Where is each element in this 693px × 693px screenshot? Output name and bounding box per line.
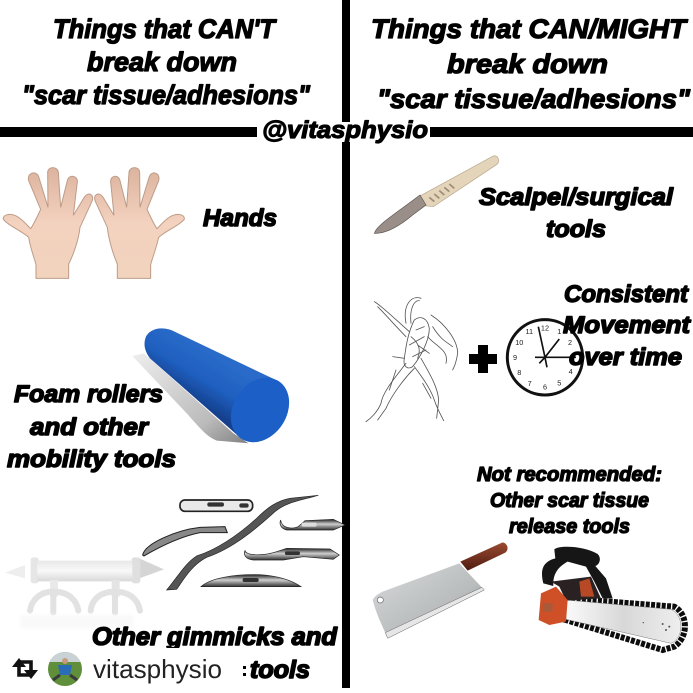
handle: @vitasphysio: @vitasphysio — [262, 117, 428, 144]
icon: anatomical figure — [366, 298, 458, 422]
heading: can or might break down — [371, 14, 691, 114]
icon: scalpel — [374, 156, 499, 233]
repost bar backing — [0, 648, 243, 693]
label: scalpel: Scalpel/surgical — [479, 184, 674, 211]
avatar — [48, 652, 82, 686]
clipped letter remnant — [243, 666, 246, 676]
label: not recommended: Not recommended: — [477, 464, 662, 486]
icon: white massage tool — [5, 557, 164, 628]
label: scalpel: tools — [546, 216, 606, 243]
icon: repost arrows — [12, 658, 38, 679]
label: consistent movement: Movement — [563, 312, 691, 339]
label: not recommended: Other scar tissue — [490, 490, 649, 512]
icon: clock — [507, 320, 583, 395]
label: foam rollers: Foam rollers — [14, 381, 163, 408]
heading: can't break down: break down — [87, 47, 237, 77]
icon: chainsaw — [539, 547, 685, 650]
icon: foam roller — [132, 328, 301, 453]
heading: can or might break down: "scar tissue/adhesions" — [377, 84, 691, 114]
label: foam rollers: and other — [30, 414, 150, 441]
icon: clock: 4 — [569, 367, 573, 376]
icon: clock: 5 — [557, 378, 561, 387]
icon: cleaver — [373, 542, 508, 638]
icon: clock: 6 — [543, 382, 547, 391]
label: consistent movement: over time — [569, 344, 682, 371]
icon: hands — [3, 168, 184, 278]
label: foam rollers: mobility tools — [7, 446, 176, 473]
label: hands: Hands — [203, 205, 277, 232]
label: consistent movement — [563, 281, 691, 371]
icon: clock: 10 — [515, 338, 523, 347]
icon: clock: 7 — [528, 379, 532, 388]
username: vitasphysio — [93, 654, 222, 684]
label: other gimmicks: Other gimmicks and — [92, 623, 338, 651]
label: not recommended: release tools — [509, 516, 630, 538]
label: scalpel — [479, 184, 674, 243]
heading: can or might break down: Things that CAN/MIGHT — [371, 14, 689, 44]
heading: can't break down — [22, 14, 311, 110]
handle backing — [257, 122, 430, 142]
icon: steel scar tissue tools — [143, 495, 345, 590]
horizontal divider — [0, 127, 693, 137]
icon: clock: 11 — [526, 327, 533, 336]
heading: can't break down: "scar tissue/adhesions" — [22, 80, 311, 110]
icon: clock: 12 — [541, 324, 549, 333]
heading: can or might break down: break down — [447, 49, 608, 79]
vertical divider — [342, 0, 350, 688]
icon: clock: 1 — [557, 327, 561, 336]
heading: can't break down: Things that CAN'T — [53, 14, 277, 44]
label: other tools: tools — [250, 656, 310, 684]
icon: clock: 9 — [513, 353, 517, 362]
label: not recommended — [477, 464, 662, 538]
label: consistent movement: Consistent — [564, 281, 689, 308]
icon: clock: 2 — [568, 338, 572, 347]
icon: plus sign — [469, 345, 497, 373]
label: foam rollers — [7, 381, 176, 473]
icon: clock: 8 — [517, 368, 521, 377]
